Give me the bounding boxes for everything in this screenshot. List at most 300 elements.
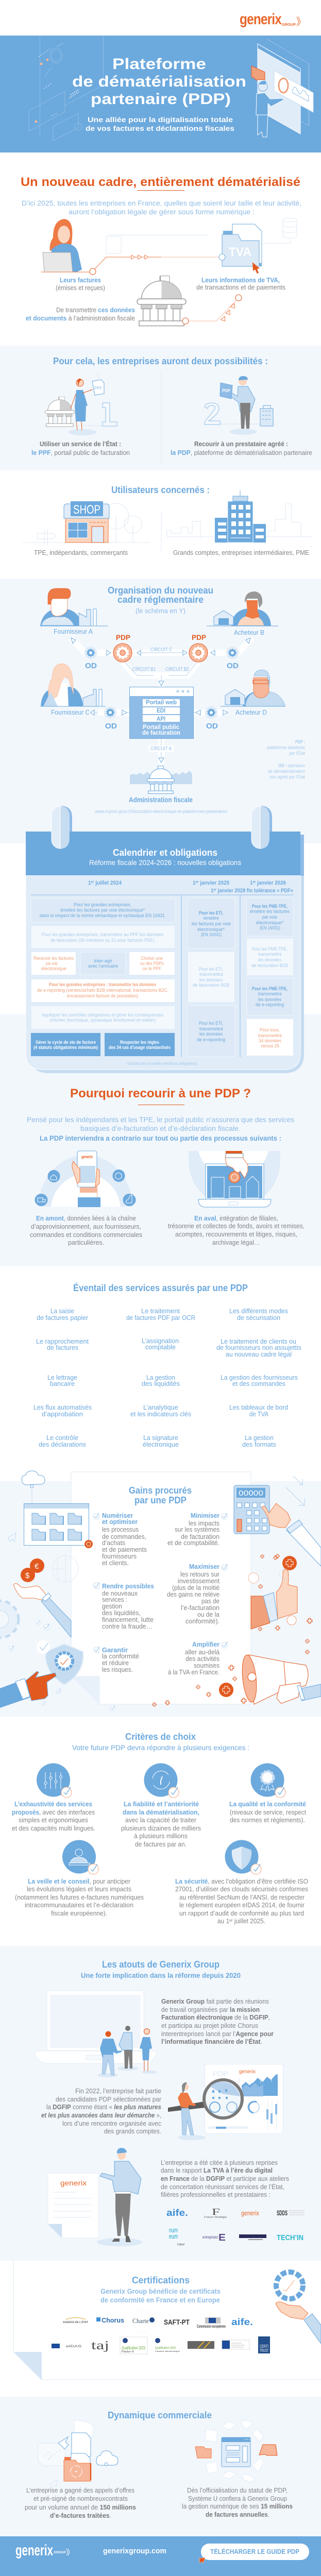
box: PME-TPE e-reporting: transmettre [258,991,282,996]
portail public de facturation [130,687,194,739]
gain: rendre possibles: Rendre possibles [102,1582,154,1590]
schema legend: de dématérialisation [268,769,305,774]
portail public de facturation: Portail web [146,699,177,706]
box: PME-TPE facturation: électronique* [256,920,283,925]
heading: utilisateurs concernés: Utilisateurs concernés : [111,485,210,495]
text: leurs factures: Leurs factures [60,276,101,284]
text: appels d'offres: d’e-factures traitées. [50,2512,111,2519]
text: réunions de travail: et participa au projet pilote Chorus [161,2022,258,2029]
illustration: option 1 PPF: PPF [94,386,102,391]
box: pour tous 34 données: 34 données [259,1038,281,1043]
certification logos row 2: Factur-X [122,2350,134,2353]
box: PME-TPE facturation: (EN 16931) [260,925,280,930]
services list: de factures [47,1344,78,1351]
text: candidates PDP: la DGFIP comme étant « les plus matures [46,2103,161,2111]
OD left: OD [105,722,117,731]
text: transmettre les données [26,306,135,322]
box: ETI facturation: les factures par voie [192,921,231,926]
banner subtitle: Une alliée pour la digitalisation totale [88,115,233,124]
text: appels d'offres: pour un volume annuel de 150 millions [25,2503,136,2511]
text: en amont: particulières. [68,1239,104,1246]
text: système U: Système U confiera à Generix Group [188,2495,287,2502]
calendar date headers: 1 [250,880,253,886]
box: ETI e-reporting: Pour les ETI, [199,1021,223,1026]
text: système U: la gestion numérique de ses 15 millions [182,2502,293,2510]
box: ETI facturation [188,898,235,948]
box: e-reporting: de e-reporting (ventes/achats B2B international, transactions B2C, [37,988,168,993]
calendar date headers: janvier 2028 fin tolérance « PDF» [216,888,293,894]
critère: sécurité: er [229,1918,233,1923]
box: e-reporting [31,979,175,1002]
footer [0,2536,321,2576]
box: recevoir les factures: par voie [46,961,58,966]
services list: des formats [242,1440,276,1448]
certification logos row 2 [52,2336,270,2354]
gain: numériser et optimiser: les processus [102,1526,139,1533]
text: rapport TVA: de concertation réunissant services de l’État, [161,2183,284,2191]
PDP left node: PDP [116,633,130,641]
schema legend: par l’État [289,751,305,756]
critère: veille et conseil: (notamment les futures e-factures numériques [15,1893,144,1901]
gain: numériser et optimiser: fournisseurs [102,1552,137,1560]
partner logos: France Stratégie [204,2216,227,2219]
illustration: en aval laptop and coin [189,1151,280,1207]
box: cycle de vie: Gérer le cycle de vie de facture [36,1040,96,1045]
services list: La saisie [50,1307,74,1315]
portail public de facturation: Portail public [143,723,179,731]
critère: exhaustivité: L’exhaustivité des services [14,1800,92,1808]
text: rapport TVA: filières professionnelles et prestataires : [161,2191,271,2198]
label: acheteur D: Acheteur D [235,708,267,716]
OD right: OD [206,722,218,731]
circuit labels: CIRCUIT B2 [165,667,189,672]
box: contrôles obligatoires [31,1006,175,1029]
box: choisir une PDP: Choisir une [141,956,163,961]
box: ETI données B2B: Pour les ETI, [199,967,223,972]
text: leurs informations de TVA: de transactions et de paiements [196,283,285,291]
services list: électronique [143,1440,179,1448]
heading: critères de choix: Critères de choix [125,1732,196,1742]
text: réunions de travail [161,1997,274,2045]
gain: amplifier: soumises [194,1662,219,1669]
services list: d’approbation [42,1410,83,1418]
calendar column 2: janvier 2025 [188,898,235,1057]
partner logos: TECH’IN [277,2233,303,2242]
box: PME-TPE données B2B [247,939,293,975]
gain: minimiser: de facturation [181,1533,219,1540]
services list: La gestion [245,1434,274,1442]
gain: amplifier: à la TVA en France. [168,1668,219,1676]
box: inter-agir [80,952,126,975]
services list: Les tableaux de bord [229,1403,288,1411]
box: choisir une PDP [129,952,175,975]
partner logos [166,2207,305,2246]
box: ETI e-reporting: les données [199,1031,223,1037]
box: PME-TPE e-reporting: de e-reporting [256,1002,284,1007]
box: pour tous 34 données: transmettre [258,1033,282,1038]
text: option 2 [171,440,312,456]
partner logos: aife. [166,2208,188,2218]
heading: dynamique commerciale: Dynamique commerciale [108,2410,212,2420]
panel: organisation schema [0,579,321,843]
certification logos row 2: TRUST [260,2348,268,2353]
gain: numériser et optimiser: de commandes, [102,1533,146,1540]
flow line: factures to TVA [94,235,219,269]
banner title: partenaire (PDP) [91,91,231,108]
heading: critères de choix [72,1732,249,1752]
box: cycle de vie [31,1033,100,1056]
partner logos: num [169,2226,178,2234]
schema heading: (le schéma en Y) [136,607,185,615]
gain: numériser et optimiser: et de paiements [102,1546,147,1553]
schema legend: plateforme labellisée [267,745,305,750]
banner subtitle [86,115,234,132]
critère: fiabilité [121,1763,201,1848]
OD top right: OD [227,662,239,670]
box: e-reporting: Pour les grandes entreprises : transmettre les données [49,982,156,987]
services list: de factures papier [37,1314,89,1321]
gain: garantir: et réduire [102,1659,129,1667]
critère: sécurité: au 1 [217,1917,230,1925]
text: candidates PDP: et les plus avancées dans leur démarche », [41,2111,161,2119]
gain: rendre possibles: contre la fraude… [102,1622,153,1630]
OD right [205,706,218,731]
services list: des liquidités [142,1380,180,1387]
schema white flow bands [71,638,252,769]
website: generixgroup.com [103,2547,166,2555]
gain: maximiser: pas de [201,1597,219,1605]
text: en amont: d’approvisionnement, aux fournisseurs, [31,1223,141,1230]
intro text: D’ici 2025, toutes les entreprises en France, quelles que soient leur taille et leur activité, [22,199,301,207]
schema legend: non agréé par l’État [269,774,305,779]
text: réunions de travail: Generix Group fait partie des réunions [161,1997,269,2005]
critère: sécurité: juillet 2025. [233,1917,265,1925]
text: option 1: le PPF, portail public de facturation [31,449,130,456]
text: réunions de travail: Facturation électronique de la DGFIP, [161,2013,270,2021]
text: en aval: trésorerie et collectes de fonds, avoirs et remises, [168,1222,305,1230]
box: inter-agir: Inter-agir [94,958,112,963]
left illustrations: gear and checks [0,1601,115,1710]
box: recevoir les factures [31,952,76,975]
panel background behind calendar bottom [0,1014,321,1266]
text: rapport TVA: L’entreprise a été citée à plusieurs reprises [161,2159,278,2166]
card corner fold [71,1676,99,1704]
box: PME-TPE e-reporting [247,978,293,1015]
text: système U [182,2486,293,2518]
partner logos: SDDS [277,2209,288,2217]
services list: au nouveau cadre légal [226,1350,292,1358]
box: e-reporting: encaissement facture de prestation) [67,993,138,998]
illustration: en amont phone: generix [81,1155,93,1159]
text: candidates PDP [41,2087,162,2135]
box: transmettre au PPF: de facturation (26 mentions ou 21 pour factures PDF) [50,938,155,943]
right illustrations: thumb up [248,1554,312,1654]
certification logos row 2: CERTI [260,2344,268,2349]
gain: minimiser [167,1512,227,1547]
label: fournisseur C: Fournisseur C [51,708,90,716]
services list: Les différents modes [229,1307,288,1315]
certification logos row 1: Charte [132,2317,149,2325]
panel: calendrier et obligations [26,806,304,1073]
gain: rendre possibles: services : [102,1596,127,1603]
text: en aval [168,1214,305,1246]
text: réunions de travail: interentreprises lancé par l’Agence pour [161,2030,274,2038]
services list: et des commandes [232,1380,285,1387]
box: PME-TPE facturation: Pour les PME-TPE, [252,904,288,909]
left illustrations: shield and pointing hand [0,1640,83,1708]
illustration: dashboard and magnifier [168,2064,283,2140]
atouts heading: Une forte implication dans la réforme depuis 2020 [81,1971,241,1979]
text: leurs factures: (émises et reçues) [56,284,105,292]
gain: garantir: la conformité [102,1652,139,1660]
certification logos row 1: AGENCE DE L’ÉTAT [63,2320,88,2324]
critère: fiabilité: de factures par an. [135,1840,187,1848]
atouts heading: Les atouts de Generix Group [102,1959,219,1970]
button: télécharger le guide [198,2544,309,2563]
OD left [104,706,117,731]
gain: maximiser: des gains ne relève [167,1590,219,1598]
calendar date headers: juillet 2024 [94,880,122,886]
critère: fiabilité: plusieurs dizaines de milliers [121,1824,201,1832]
text: en amont: commandes et conditions commerciales [30,1231,142,1239]
box: PME-TPE données B2B: Pour les PME-TPE, [252,946,288,952]
text: option 1: Utiliser un service de l’État : [40,440,121,448]
text: transmettre les données: De transmettre ces données [56,306,135,314]
text: rapport TVA: dans le rapport La TVA à l’ère du digital [161,2166,273,2174]
OD top right [226,647,239,670]
critère: sécurité [175,1840,308,1925]
critère: sécurité: au référentiel SecNum de l’ANSI, de respecter [179,1893,305,1901]
services list [33,1307,301,1448]
box: 34 cas d'usage: des 34 cas d’usage standardisés [109,1045,171,1050]
box: ETI e-reporting: transmettre [199,1026,223,1031]
icon: administration building [137,276,242,326]
schema heading [108,585,213,615]
text: candidates PDP: lors d’une rencontre organisée avec [62,2120,161,2127]
box: inter-agir: avec l’annuaire [88,963,118,969]
critère: sécurité: 27001, d’utiliser des clouds sécurisés conformes [175,1885,308,1893]
certification logos row 1: Chorus [102,2316,124,2324]
illustration: TVA folder [219,218,297,274]
calendar column 3: janvier 2026 [246,898,293,1056]
banner title: de dématérialisation [72,73,246,90]
services list: Le lettrage [47,1374,77,1381]
text: appels d'offres: L’entreprise a gagné des appels d’offres [26,2486,134,2494]
schema heading: cadre réglementaire [117,595,204,605]
certifications heading: de conformité en France et en Europe [100,2296,220,2304]
calendar date headers: er [213,888,216,892]
gain: garantir: Garantir [102,1646,128,1654]
text: leurs factures [56,276,105,292]
person: fournisseur A [40,588,108,626]
critère: veille et conseil [15,1840,144,1917]
heading: gains procurés: Gains procurés [129,1485,192,1496]
illustration: dashboard and magnifier: PDP [213,2070,228,2078]
portail public de facturation: API [157,715,165,722]
certification logos row 1: aife. [231,2317,253,2327]
illustration: dashboard and magnifier: generix [239,2069,256,2075]
box: contrôles obligatoires: Appliquer les contrôles obligatoires et gérer les conséquences [42,1012,163,1018]
box: PME-TPE données B2B: transmettre [258,952,282,957]
text: leurs informations de TVA: Leurs informations de TVA, [201,276,280,284]
text: en amont: En amont, données liées à la chaîne [36,1214,136,1222]
gain: rendre possibles: de nouveaux [102,1589,138,1597]
services list: comptable [145,1343,176,1351]
critère: fiabilité: La fiabilité et l’antériorité [124,1800,199,1808]
administration fiscale [129,766,193,804]
illustration: option 2 PDP [204,376,276,435]
text: en aval: archivage légal… [212,1239,260,1246]
button: télécharger le guide: TÉLÉCHARGER LE GUIDE PDP [210,2548,299,2555]
partner logos: eum [169,2232,178,2240]
certification logos row 2: Qualification 2020 [155,2347,176,2350]
circuit labels [132,647,189,752]
box: transmettre au PPF [31,926,175,948]
panel: atouts de generix group [0,1946,321,2261]
gain: numériser et optimiser: d’achats [102,1539,125,1547]
critère: veille et conseil: les évolutions légales et leurs impacts [27,1885,131,1893]
gain: maximiser: conformité). [185,1617,219,1625]
services list: Le contrôle [46,1434,78,1442]
intro text [22,199,301,216]
calendar date headers: janvier 2026 [256,880,286,886]
box: pour tous 34 données [247,1019,293,1056]
gain: numériser et optimiser: Numériser [102,1512,133,1519]
text: rapport TVA: en France de la DGFIP et participe aux ateliers [161,2175,289,2182]
intro: PDP processes: Pensé pour les indépendants et les TPE, le portail public n’assurera que des services [27,1115,294,1124]
text: en aval: acomptes, recouvrements et litiges, risques, [175,1230,297,1238]
text: user types: TPE, indépendants, commerçants [34,549,128,556]
box: ETI facturation: (EN 16931) [201,932,222,937]
illustration: man with document [48,2148,142,2246]
critère: exhaustivité [12,1763,95,1832]
box: recevoir les factures: Recevoir les factures [33,956,74,961]
portail public de facturation: EDI [157,707,165,714]
gain: rendre possibles: gestion [102,1602,122,1610]
critère: sécurité: La sécurité, avec l’obligation d’être certifiée ISO [175,1877,308,1885]
services list: La gestion des fournisseurs [221,1374,298,1381]
box: émettre les factures grandes entreprises [31,899,175,922]
panel: dynamique commerciale [0,2397,321,2536]
heading: pourquoi recourir: Pourquoi recourir à une PDP ? [70,1087,251,1100]
footer logo: generix [15,2542,53,2559]
footer logo: GROUP [54,2551,66,2554]
critère: qualité: La qualité et la conformité [229,1800,306,1808]
atouts heading [81,1959,241,1979]
box: ETI e-reporting: de e-reporting [197,1037,225,1042]
box: ETI e-reporting [188,1006,235,1057]
gain: minimiser: sur les systèmes [175,1526,219,1533]
box: ETI facturation: électronique* [197,927,225,932]
certification logos row 2: taj [91,2339,109,2352]
text: option 1 [31,440,130,456]
intro: PDP processes: La PDP interviendra a contrario sur tout ou partie des processus suivants : [40,1134,281,1142]
certification logos row 1: Commission européenne [197,2324,226,2329]
right illustrations: calculator and hand [234,1476,321,1566]
critère: exhaustivité: proposés, avec des interfaces [12,1808,95,1816]
PDP right node [189,633,208,662]
calendar date headers: 1 [193,880,196,886]
PDP right node: PDP [192,633,206,641]
calendar date headers: er [91,880,94,884]
illustration: badge on hand [276,2272,321,2344]
critère: fiabilité: dans la dématérialisation, [123,1808,199,1816]
critère: veille et conseil: La veille et le conseil, pour anticiper [28,1877,131,1885]
gain: maximiser: (plus de la moitié [172,1584,219,1591]
box: transmettre au PPF: Pour les grandes entreprises, transmettre au PPF les données [42,932,163,937]
gain: numériser et optimiser [93,1512,147,1567]
certifications heading [100,2275,221,2304]
circuit labels: CIRCUIT A [150,746,172,752]
box: 34 cas d'usage: Respecter les règles [120,1040,159,1045]
calendar date headers: janvier 2025 [198,880,229,886]
partner logos: F [212,2207,220,2217]
text: réunions de travail: l’informatique financière de l’État. [161,2038,262,2045]
text: système U: Dès l’officialisation du statut de PDP, [187,2486,288,2494]
partner logos: E [218,2232,226,2243]
box: ETI facturation: émettre [204,916,219,921]
box: contrôles obligatoires: d’échec (technique, syntaxique fonctionnel et métier) [50,1018,156,1023]
left illustrations: coins on hand: € [35,1562,39,1571]
illustration: option 2 PDP: PDP [222,388,231,393]
box: ETI données B2B: transmettre [199,972,223,977]
gain: numériser et optimiser: et optimiser [102,1518,138,1526]
gain: rendre possibles: des liquidités, [102,1609,141,1617]
critère: fiabilité: à plusieurs millions [134,1832,188,1840]
heading: deux possibilités: Pour cela, les entreprises auront deux possibilités : [53,356,268,366]
schema legend: OD : opérateur [278,763,305,768]
heading: critères de choix: Votre future PDP devra répondre à plusieurs exigences : [72,1743,249,1752]
illustration: man with document: generix [60,2179,87,2187]
logo: generix group: GROUP [282,23,296,27]
heading: éventail des services: Éventail des services assurés par une PDP [73,1282,248,1293]
text: candidates PDP: Fin 2022, l’entreprise fait partie [75,2087,161,2095]
illustration: TVA folder: TVA [229,245,251,259]
PDP left node [113,633,132,662]
box: PME-TPE données B2B: les données [258,957,281,962]
services list: de factures PDF par OCR [126,1314,195,1321]
schema heading: Organisation du nouveau [108,585,213,596]
heading: un nouveau cadre: Un nouveau cadre, entièrement dématérialisé [21,175,300,189]
banner subtitle: de vos factures et déclarations fiscales [86,124,234,132]
heading: gains procurés [129,1485,192,1505]
illustration: en amont phone [35,1151,136,1207]
text: rapport TVA [161,2159,289,2198]
text: en aval: En aval, intégration de filiales, [194,1214,278,1222]
text: en amont [30,1214,142,1246]
panel: deux possibilités [0,346,321,470]
critère: sécurité: un rapport d’audit de conformité au plus tard [179,1909,304,1917]
text: user types [34,549,309,556]
gain: minimiser: et de comptabilité. [167,1539,219,1547]
calendar title: Calendrier et obligations [113,848,217,858]
services list: La gestion [146,1374,175,1381]
heading: gains procurés: par une PDP [134,1495,187,1505]
box: ETI données B2B: de facturation B2B [193,982,229,988]
services list: Les flux automatisés [33,1403,92,1411]
gain: garantir: les risques. [102,1666,133,1673]
illustration: woman on laptop with invoices [41,219,96,275]
box: PME-TPE facturation [246,898,293,936]
certification logos row 2: Facture électronique [155,2350,180,2352]
box: pour tous 34 données: versus 26 [261,1043,279,1048]
text: appels d'offres: et pré-signé de nombreuxcontrats [33,2495,128,2502]
illustration: shop [23,501,161,551]
box: recevoir les factures: électronique [41,966,66,971]
services list: et les indicateurs clés [130,1410,191,1418]
banner title [72,56,246,108]
banner title: Plateforme [112,56,206,73]
